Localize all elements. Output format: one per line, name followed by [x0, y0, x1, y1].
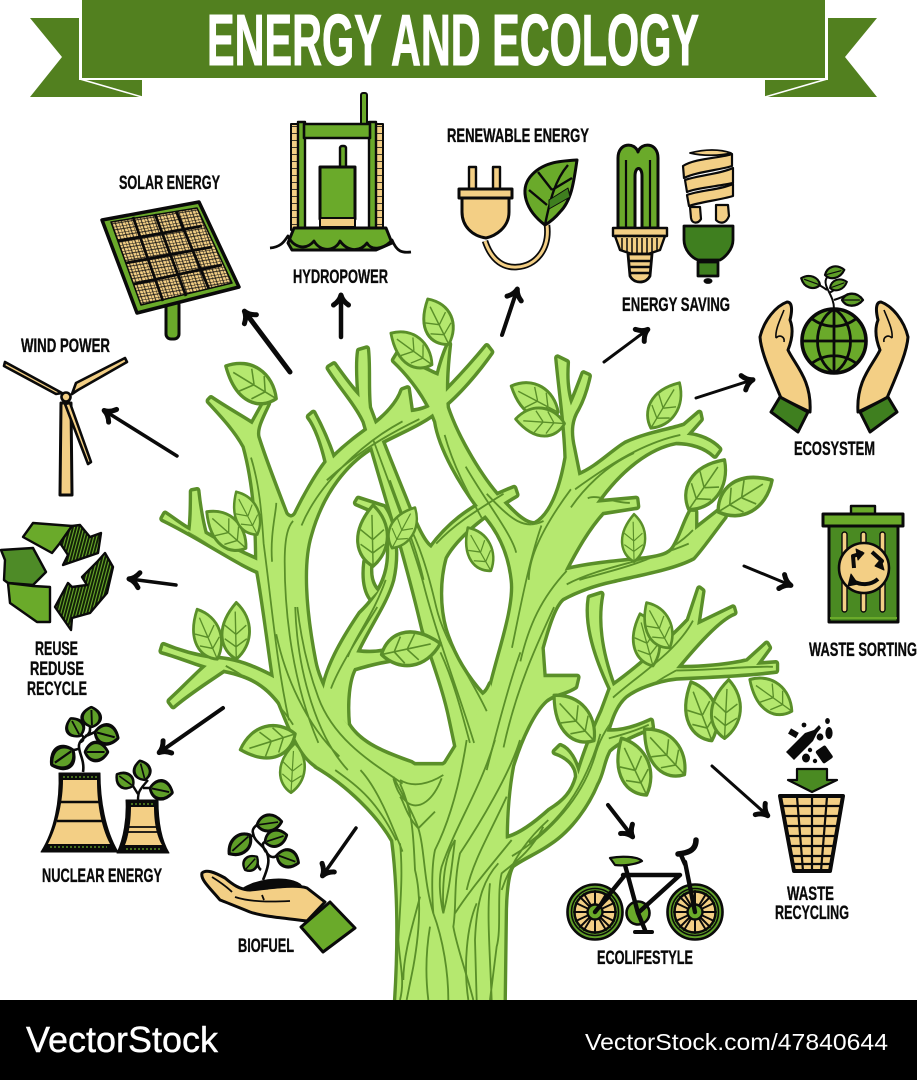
label: renewable energy: RENEWABLE ENERGY	[447, 126, 589, 147]
arrow to nuclear energy	[160, 708, 223, 752]
footer bar	[0, 1000, 917, 1080]
tree outline	[162, 344, 776, 1001]
icon: solar panel	[102, 202, 239, 339]
trunk veins	[393, 740, 548, 1000]
icon: recycle arrows	[1, 523, 113, 630]
hand: left	[760, 302, 810, 432]
icon: plug and leaf	[459, 160, 577, 267]
tree veins	[188, 419, 773, 856]
saddle	[610, 857, 642, 865]
arrow to wind power	[105, 411, 177, 456]
label: biofuel: BIOFUEL	[238, 936, 294, 957]
ribbon main band	[82, 0, 825, 78]
icon: waste recycling basket	[780, 718, 843, 871]
icon: ecosystem hands and globe	[760, 264, 908, 432]
sprout: large	[46, 707, 121, 774]
hand: right	[858, 302, 908, 432]
label: waste recycling: RECYCLING	[775, 903, 849, 924]
bulb: fluorescent tube	[613, 145, 667, 282]
tree leaves	[185, 292, 799, 802]
icon: hydropower	[270, 93, 411, 252]
label: reuse reduse recycle: REUSE	[35, 639, 78, 660]
arrow to solar energy	[245, 312, 290, 372]
wheel: rear	[568, 884, 622, 940]
title banner	[30, 0, 877, 97]
label: reuse reduse recycle: REDUSE	[30, 659, 84, 680]
globe	[802, 309, 866, 373]
label: waste recycling	[775, 884, 849, 924]
arrows	[105, 290, 790, 875]
frame	[595, 862, 695, 930]
hand	[202, 871, 325, 921]
arrow to energy saving	[604, 330, 647, 362]
icon: biofuel hand with sprout	[202, 813, 355, 952]
icon: nuclear towers with sprouts	[41, 707, 174, 853]
recycle arrow: right	[55, 553, 113, 630]
label: reuse reduse recycle	[27, 639, 87, 700]
handlebar	[678, 840, 696, 854]
footer url: VectorStock.com/47840644	[585, 1029, 888, 1055]
sprout	[799, 264, 863, 309]
tree fill	[162, 344, 776, 1001]
arrow to ecolifestyle	[608, 805, 632, 836]
down arrow	[788, 769, 837, 792]
recycle arrow: left	[1, 548, 50, 622]
icon: waste sorting bin	[823, 506, 903, 622]
label: nuclear energy: NUCLEAR ENERGY	[42, 866, 162, 887]
arrow to renewable energy	[502, 290, 517, 335]
icon: bicycle	[568, 840, 722, 940]
label: wind power: WIND POWER	[21, 336, 110, 357]
label: energy saving: ENERGY SAVING	[622, 295, 730, 316]
arrow to waste recycling	[712, 766, 767, 815]
ribbon left tail	[30, 18, 142, 97]
chainring	[626, 902, 650, 924]
footer brand: VectorStock	[26, 1019, 219, 1060]
tower: large	[41, 773, 118, 852]
arrow to ecosystem	[696, 380, 752, 398]
wheel: front	[668, 884, 722, 940]
recycle arrow: top	[23, 523, 101, 565]
label: solar energy: SOLAR ENERGY	[119, 173, 220, 194]
soil	[238, 879, 307, 892]
arrow to waste sorting	[744, 566, 790, 585]
tree	[162, 292, 799, 1001]
label: ecolifestyle: ECOLIFESTYLE	[597, 948, 693, 969]
label: ecosystem: ECOSYSTEM	[794, 439, 875, 460]
ribbon right tail	[765, 18, 877, 97]
label: waste recycling: WASTE	[787, 884, 834, 905]
arrow to recycle	[130, 579, 176, 585]
label: hydropower: HYDROPOWER	[293, 267, 388, 288]
arrow to biofuel	[323, 828, 356, 875]
sprout: small	[112, 759, 174, 801]
debris	[786, 718, 834, 764]
sprout	[224, 813, 302, 880]
icon: energy saving bulbs	[613, 145, 733, 283]
bulb: spiral	[683, 150, 733, 283]
arrow to hydropower	[339, 296, 343, 337]
icon: wind turbine	[4, 358, 127, 495]
tower: small	[117, 800, 169, 853]
basket	[780, 796, 843, 871]
label: reuse reduse recycle: RECYCLE	[27, 679, 87, 700]
